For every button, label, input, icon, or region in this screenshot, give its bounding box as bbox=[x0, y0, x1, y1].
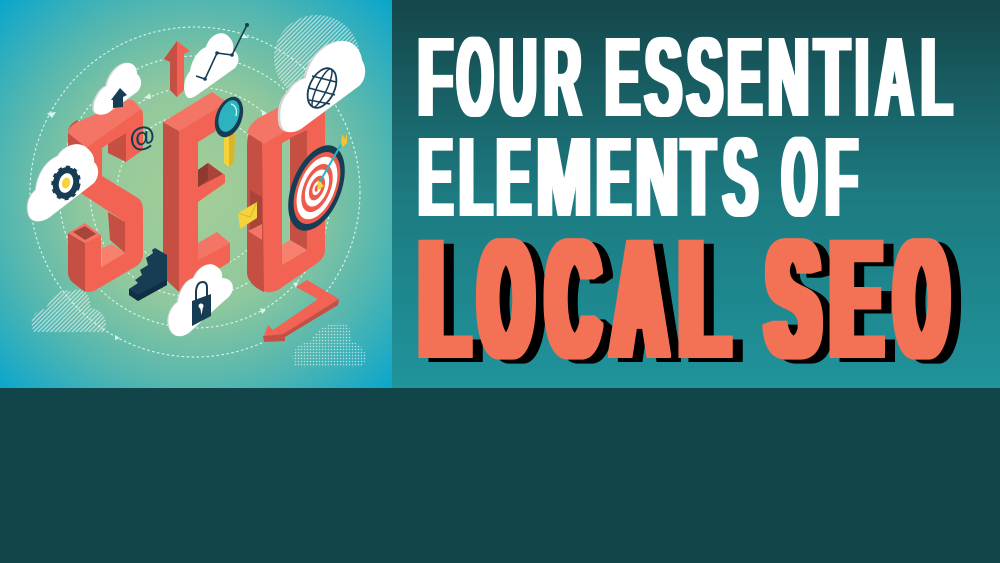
orbit arrowheads bbox=[47, 33, 298, 340]
icon: upload cloud bbox=[92, 63, 141, 115]
heading line: local seo shadow: L bbox=[690, 211, 738, 396]
heading line: local seo shadow: A bbox=[623, 211, 676, 396]
heading line: local seo: L bbox=[680, 207, 728, 392]
icon: globe cloud bbox=[278, 41, 365, 132]
heading line: four essential: R bbox=[544, 14, 581, 140]
heading line: four essential: S bbox=[645, 14, 682, 140]
heading line: elements of: L bbox=[459, 114, 492, 240]
heading line: four essential: I bbox=[856, 14, 868, 140]
heading line: four essential bbox=[418, 14, 952, 140]
heading line: four essential: E bbox=[605, 14, 640, 140]
heading line: local seo shadow: C bbox=[558, 211, 608, 396]
icon: envelope bbox=[238, 202, 257, 229]
heading line: local seo: E bbox=[832, 207, 881, 392]
heading line: elements of: O bbox=[782, 114, 817, 240]
pattern: dotted cloud bbox=[293, 323, 366, 367]
heading line: four essential: O bbox=[457, 14, 493, 140]
heading line: local seo shadow: L bbox=[430, 211, 478, 396]
icon: staircase bbox=[129, 248, 167, 301]
icon: chart cloud bbox=[184, 23, 249, 98]
icon: red return arrow bbox=[263, 280, 339, 342]
heading line: four essential: E bbox=[727, 14, 762, 140]
heading line: elements of: M bbox=[536, 114, 592, 240]
dashed orbit rings bbox=[30, 27, 360, 357]
icon: magnifying glass bbox=[210, 93, 248, 167]
heading line: four essential: U bbox=[500, 14, 537, 140]
icon: target with arrow bbox=[277, 133, 356, 239]
heading line: local seo: A bbox=[613, 207, 666, 392]
heading line: elements of: S bbox=[723, 114, 758, 240]
heading line: local seo shadow: S bbox=[777, 211, 829, 396]
heading line: elements of: E bbox=[596, 114, 631, 240]
heading line: four essential: A bbox=[876, 14, 913, 140]
icon: red up arrow bbox=[164, 41, 190, 97]
heading line: local seo bbox=[420, 207, 947, 392]
icon: gear cloud bbox=[27, 144, 98, 221]
panel: bottom band bbox=[0, 388, 1000, 563]
pattern: striped cloud bbox=[32, 289, 106, 332]
pattern: striped circle bbox=[274, 15, 360, 101]
heading line: four essential: F bbox=[418, 14, 453, 140]
heading line: local seo: L bbox=[420, 207, 468, 392]
title: L bbox=[921, 14, 952, 140]
heading line: elements of: T bbox=[682, 114, 715, 240]
panel: SEO illustration bbox=[0, 0, 392, 388]
heading line: elements of: E bbox=[418, 114, 453, 240]
heading line: local seo: S bbox=[767, 207, 819, 392]
letter S bbox=[68, 100, 143, 292]
icon: at sign: @ bbox=[126, 120, 158, 154]
heading line: elements of: E bbox=[496, 114, 531, 240]
heading line: local seo shadow: O bbox=[490, 211, 542, 396]
letter O bbox=[247, 96, 325, 292]
heading line: local seo shadow bbox=[430, 211, 957, 396]
icon: lock cloud bbox=[167, 264, 233, 336]
heading line: four essential: S bbox=[687, 14, 723, 140]
heading line: four essential: N bbox=[768, 14, 809, 140]
letter E bbox=[163, 92, 230, 292]
heading line: elements of bbox=[418, 114, 858, 240]
heading line: local seo: O bbox=[480, 207, 532, 392]
title bbox=[418, 14, 957, 396]
title: F bbox=[825, 114, 858, 240]
heading line: elements of: N bbox=[636, 114, 678, 240]
heading line: local seo shadow: E bbox=[842, 211, 891, 396]
heading line: local seo: C bbox=[548, 207, 598, 392]
heading line: four essential: T bbox=[815, 14, 849, 140]
panel: right title background bbox=[392, 0, 1000, 388]
